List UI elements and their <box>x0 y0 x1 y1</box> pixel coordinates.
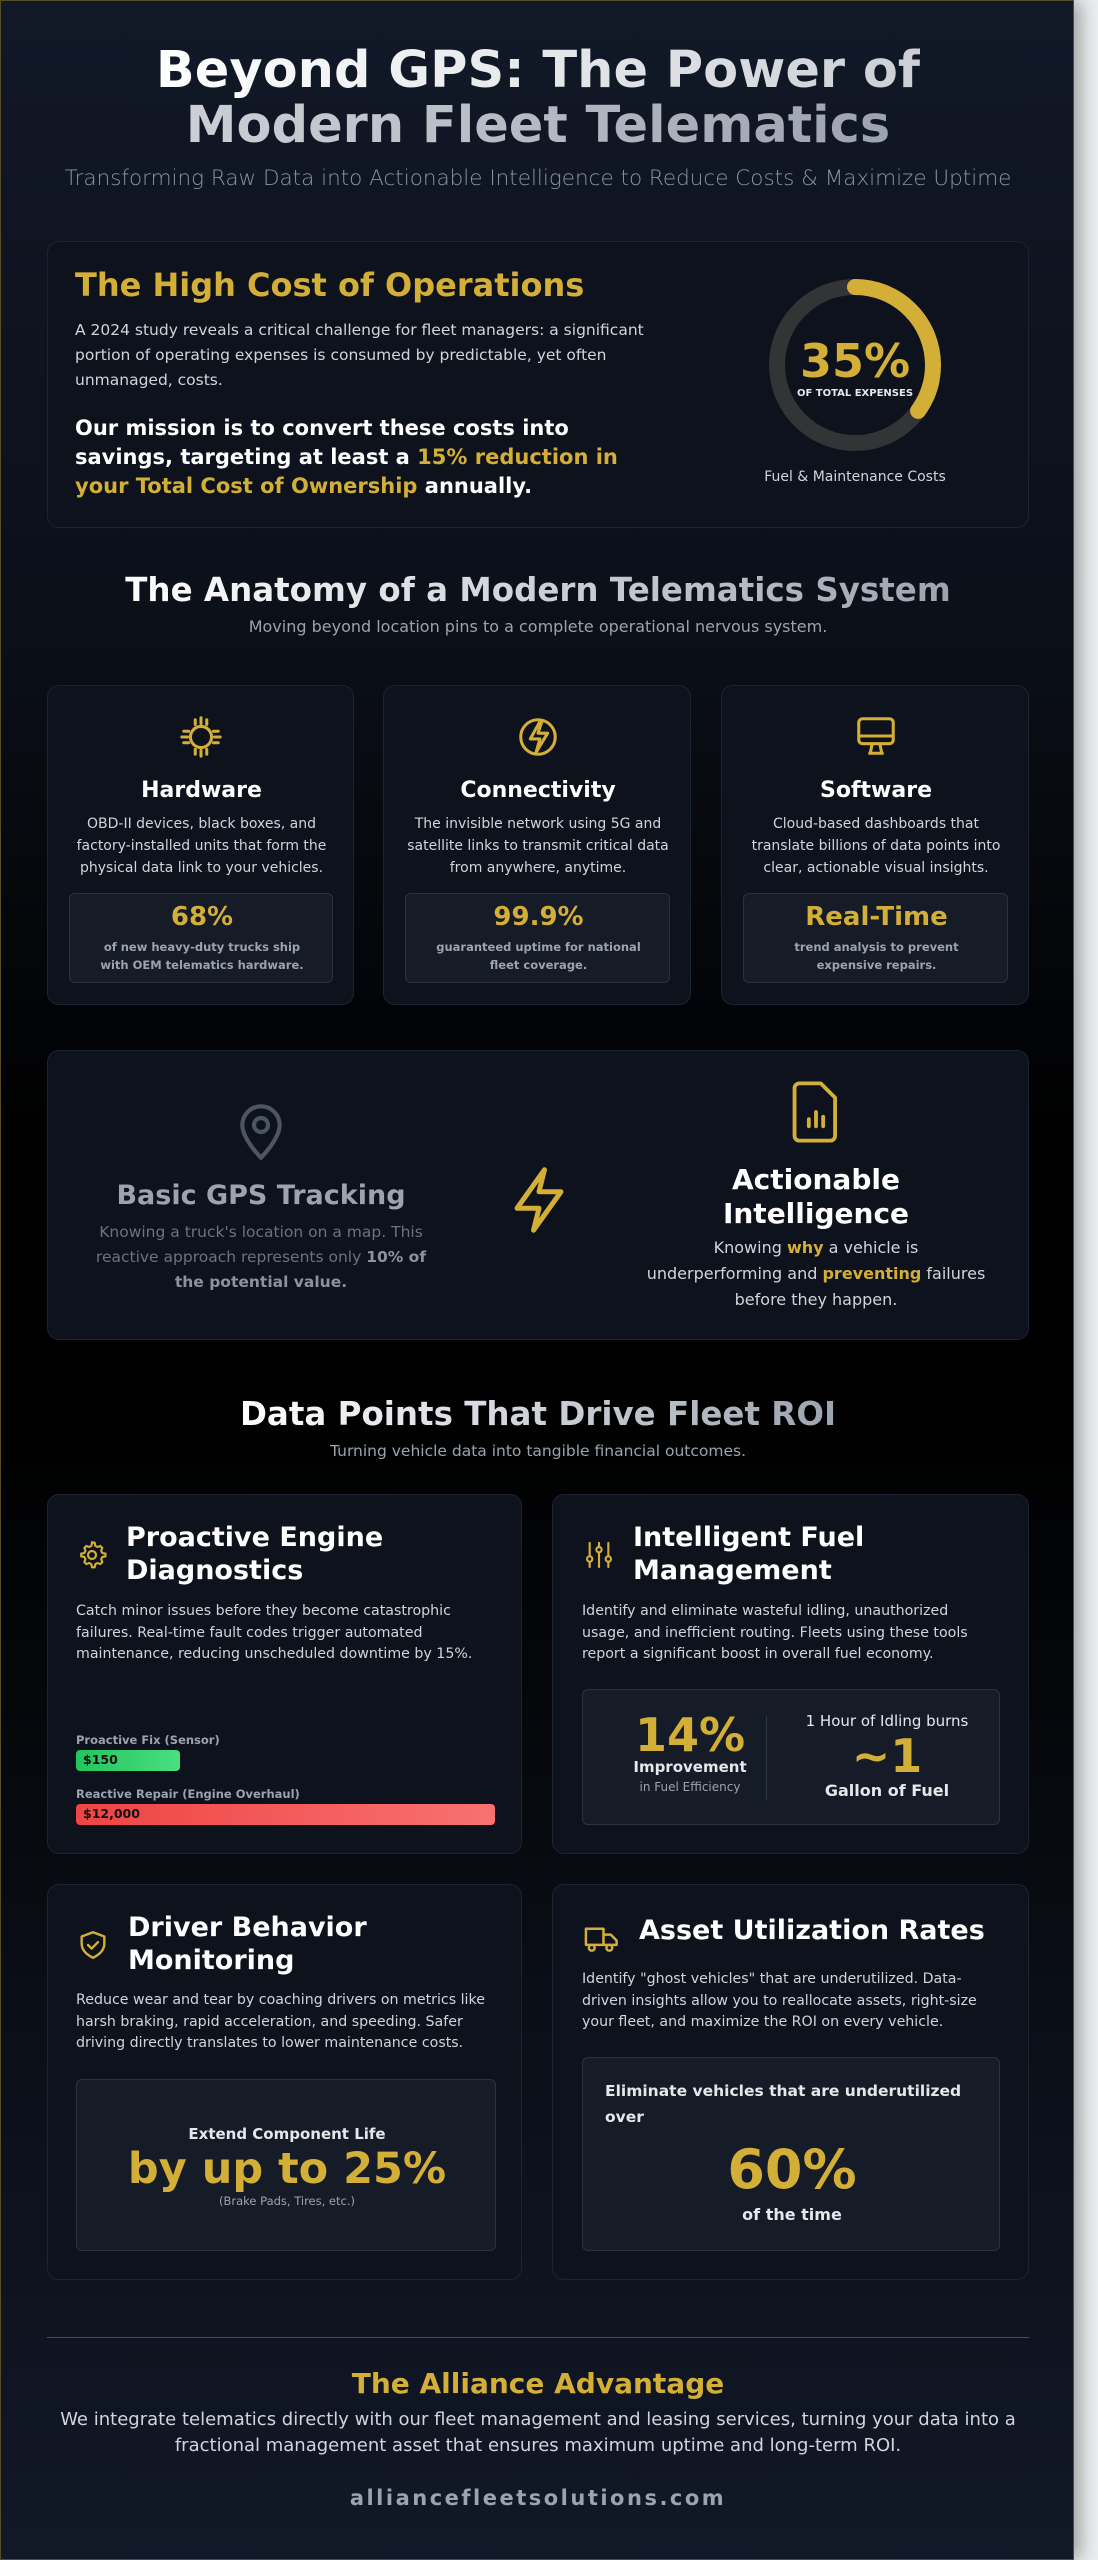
panel: driver behavior <box>47 1884 522 2280</box>
desc: Reduce wear and tear by coaching drivers on metrics like harsh braking, rapid acceleration, and speeding. Safer driving directly translates to lower maintenance costs. <box>76 1992 485 2051</box>
text: mission: Our mission is to convert these costs into savings, targeting at least a 15% reduction in your Total Cost of Ownership annually. <box>75 416 618 498</box>
title: Proactive Engine <box>126 1522 383 1553</box>
stat box: trend analysis to prevent <box>794 940 959 954</box>
icon: document chart <box>792 1082 837 1142</box>
title: Driver Behavior <box>128 1912 367 1943</box>
icon: map pin <box>240 1104 282 1160</box>
panel: fuel management <box>552 1494 1029 1854</box>
panel: asset utilization <box>552 1884 1029 2280</box>
stat box: fuel <box>582 1689 1000 1825</box>
stat box: 60%: of the time <box>742 2205 842 2224</box>
stat box: 99.9% <box>493 902 584 932</box>
icon: monitor <box>857 717 895 755</box>
icon: bolt circle <box>519 718 557 756</box>
stat box: guaranteed uptime for national <box>436 940 641 954</box>
bar chart: $12,000 <box>83 1806 140 1821</box>
heading: alliance advantage: The Alliance Advantage <box>352 2367 724 2400</box>
title <box>126 1522 383 1586</box>
bar chart: Reactive Repair (Engine Overhaul) <box>76 1787 300 1801</box>
desc: translate billions of data points into clear, actionable visual insights. <box>752 838 1000 876</box>
title: Connectivity <box>460 778 616 803</box>
donut chart <box>769 279 941 451</box>
title <box>156 41 920 155</box>
panel: hardware <box>47 685 354 1005</box>
title: basic gps: Basic GPS Tracking <box>116 1180 406 1211</box>
title: Modern Fleet Telematics <box>186 96 890 155</box>
stat box: fuel: ~1 <box>852 1729 922 1783</box>
stat box: 60% <box>582 2057 1000 2251</box>
desc: OBD-II devices, black boxes, and factory-installed units that form the physical data link to your vehicles. <box>77 816 326 876</box>
stat box: fuel: 1 Hour of Idling burns <box>806 1712 968 1730</box>
text: study: A 2024 study reveals a critical challenge for fleet managers: a significant portion of operating expenses is consumed by predictable, yet often unmanaged, costs. <box>75 321 644 389</box>
stat box: expensive repairs. <box>817 958 936 972</box>
stat box: 60%: 60% <box>727 2138 857 2201</box>
stat box: 60%: Eliminate vehicles that are underutilized <box>605 2082 961 2100</box>
panel: connectivity <box>383 685 691 1005</box>
subtitle: Transforming Raw Data into Actionable Intelligence to Reduce Costs & Maximize Uptime <box>65 166 1011 191</box>
stat box: 68% <box>171 902 233 932</box>
subtitle: anatomy: Moving beyond location pins to a complete operational nervous system. <box>249 617 827 636</box>
stat box <box>69 893 333 983</box>
panel: high cost <box>47 241 1029 528</box>
title: Beyond GPS: The Power of <box>156 41 920 100</box>
text: actionable <box>647 1238 985 1309</box>
bar chart: $150 <box>83 1752 118 1767</box>
stat box: component life: (Brake Pads, Tires, etc.) <box>219 2194 355 2208</box>
text: actionable: Knowing why a vehicle is <box>714 1238 918 1257</box>
desc <box>752 816 1000 876</box>
donut chart: OF TOTAL EXPENSES <box>797 388 913 399</box>
stat box: component life: Extend Component Life <box>188 2125 386 2143</box>
title: Intelligent Fuel <box>633 1522 864 1553</box>
icon: truck <box>584 1928 618 1952</box>
icon: chip <box>180 716 222 758</box>
desc: Identify "ghost vehicles" that are underutilized. Data-driven insights allow you to reallocate assets, right-size your fleet, and maximize the ROI on every vehicle. <box>582 1971 977 2030</box>
title: actionable: Intelligence <box>723 1197 909 1230</box>
text: basic gps: Knowing a truck's location on a map. This reactive approach represents only 10% of the potential value. <box>96 1223 426 1291</box>
bar chart <box>76 1733 495 1825</box>
icon: sliders <box>586 1542 612 1568</box>
stat box: fuel: Gallon of Fuel <box>825 1781 949 1800</box>
title: Management <box>633 1555 832 1586</box>
stat box <box>405 893 670 983</box>
title: Monitoring <box>128 1945 294 1976</box>
title: Hardware <box>141 778 262 803</box>
stat box: fuel: 14% <box>635 1708 745 1762</box>
stat box: 60%: over <box>605 2108 644 2126</box>
title <box>128 1912 367 1976</box>
text: actionable: underperforming and preventing failures before they happen. <box>647 1264 985 1309</box>
panel: comparison <box>47 1050 1029 1340</box>
heading: data points: Data Points That Drive Fleet ROI <box>240 1395 836 1433</box>
desc: Cloud-based dashboards that <box>773 816 979 832</box>
stat box: with OEM telematics hardware. <box>100 958 304 972</box>
icon: gear <box>80 1541 107 1568</box>
heading: high cost: The High Cost of Operations <box>75 266 584 304</box>
title: Diagnostics <box>126 1555 303 1586</box>
icon: arrow bolt <box>514 1167 564 1233</box>
stat box: fuel: Improvement <box>633 1758 747 1776</box>
title: actionable <box>723 1163 909 1230</box>
heading: anatomy: The Anatomy of a Modern Telematics System <box>125 571 951 609</box>
panel: engine diagnostics <box>47 1494 522 1854</box>
title: Asset Utilization Rates <box>639 1915 985 1946</box>
stat box: fleet coverage. <box>490 958 587 972</box>
subtitle: data points: Turning vehicle data into tangible financial outcomes. <box>330 1442 746 1460</box>
stat box: Real-Time <box>805 902 948 932</box>
stat box: fuel: in Fuel Efficiency <box>640 1780 740 1794</box>
stat box: component life <box>76 2079 496 2251</box>
icon: shield <box>80 1931 106 1959</box>
title: actionable: Actionable <box>732 1163 900 1196</box>
desc: Catch minor issues before they become catastrophic failures. Real-time fault codes trigger automated maintenance, reducing unscheduled downtime by 15%. <box>76 1603 472 1662</box>
donut chart: 35% <box>800 334 910 388</box>
stat box <box>743 893 1008 983</box>
title: Software <box>820 778 932 803</box>
bar chart: Proactive Fix (Sensor) <box>76 1733 220 1747</box>
panel: software <box>721 685 1029 1005</box>
text: alliance: We integrate telematics directly with our fleet management and leasing services, turning your data into a fractional management asset that ensures maximum uptime and long-term ROI. <box>60 2409 1016 2456</box>
desc: The invisible network using 5G and satellite links to transmit critical data from anywhere, anytime. <box>407 816 669 876</box>
stat box: of new heavy-duty trucks ship <box>104 940 300 954</box>
desc: Identify and eliminate wasteful idling, unauthorized usage, and inefficient routing. Fleets using these tools report a significant boost in overall fuel economy. <box>582 1603 968 1662</box>
url: alliancefleetsolutions.com <box>350 2486 726 2510</box>
donut label: Fuel & Maintenance Costs <box>764 469 946 485</box>
title <box>633 1522 864 1586</box>
stat box: component life: by up to 25% <box>128 2144 446 2194</box>
